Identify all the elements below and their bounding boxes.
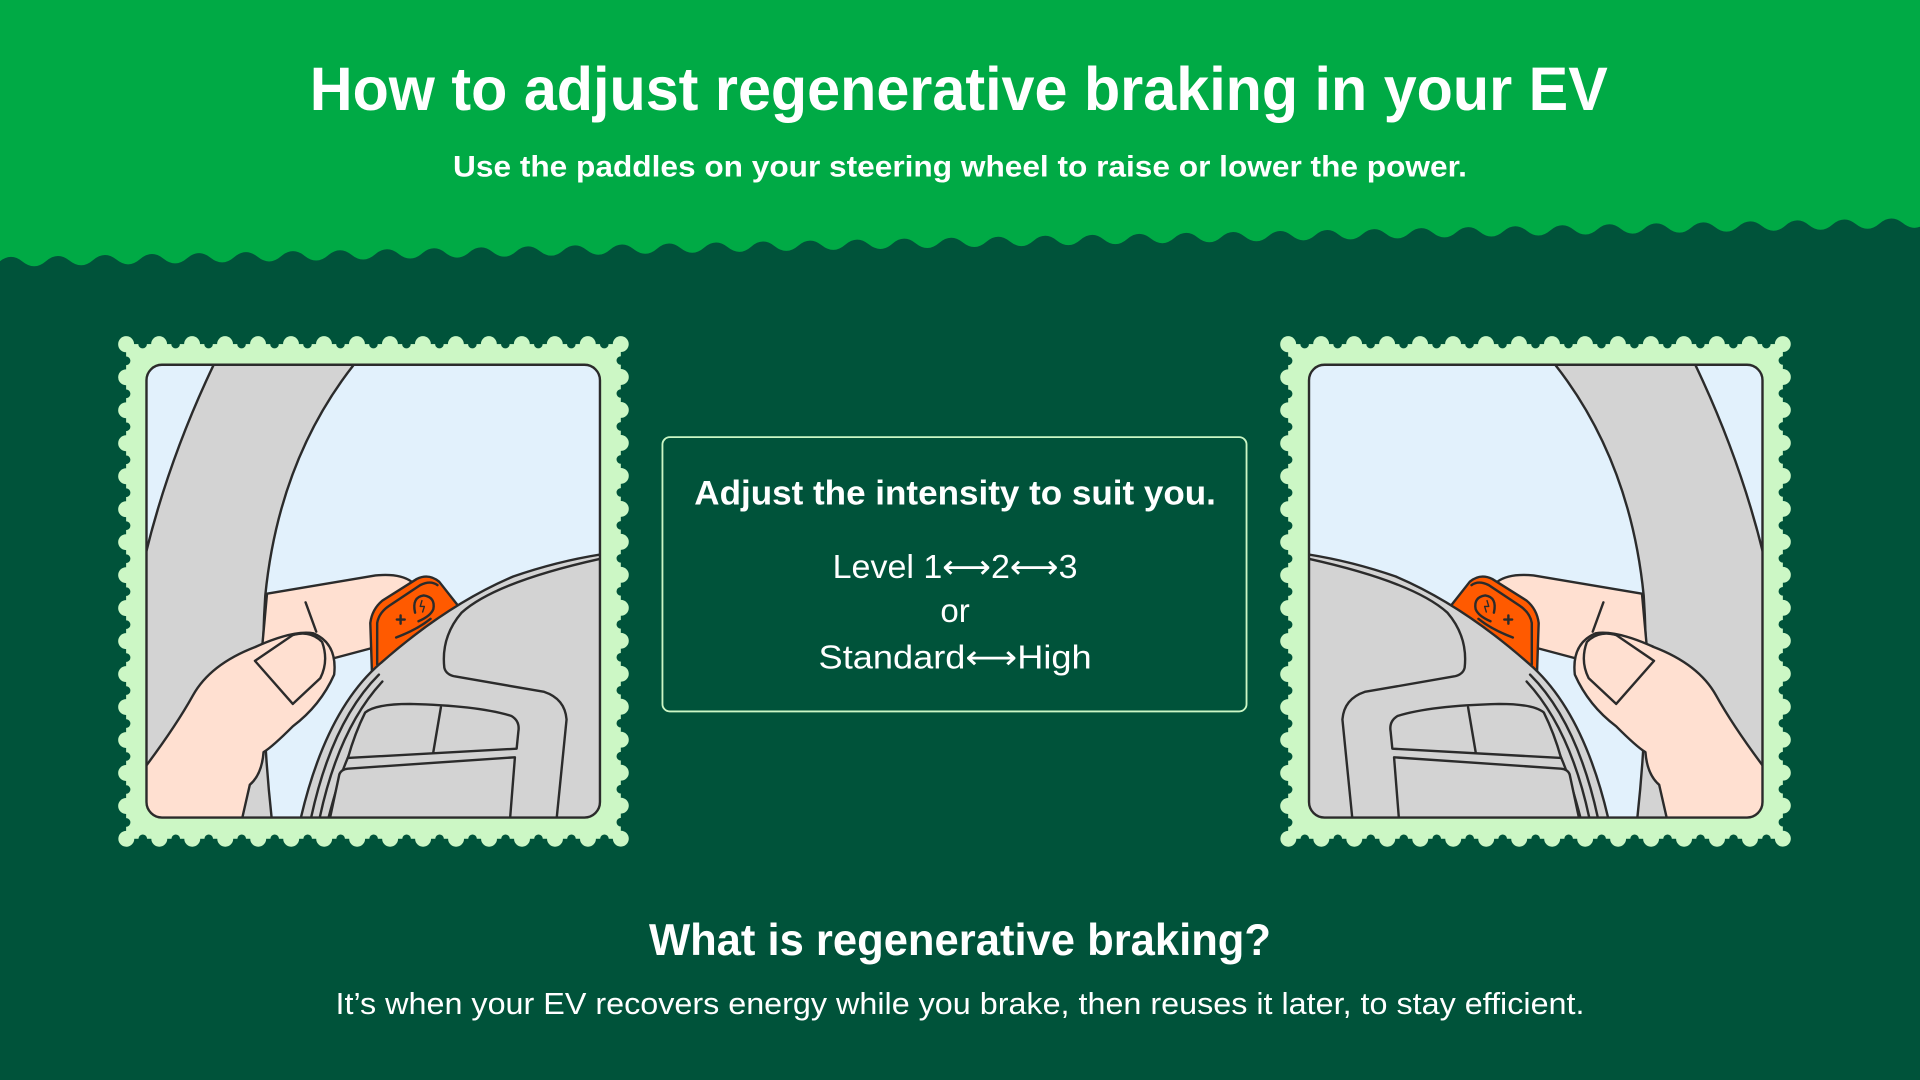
bottom body text: It’s when your EV recovers energy while you brake, then reuses it later, to stay efficient. <box>336 987 1584 1021</box>
header band <box>0 0 1920 267</box>
level text: Level 1⟷2⟷3 <box>833 549 1078 586</box>
bottom heading: What is regenerative braking? <box>649 916 1271 965</box>
subtitle: Use the paddles on your steering wheel to raise or lower the power. <box>453 150 1467 183</box>
stamp: right illustration <box>1288 344 1783 839</box>
title: How to adjust regenerative braking in your EV <box>310 55 1608 123</box>
panel: intensity levels <box>662 437 1247 711</box>
panel heading: Adjust the intensity to suit you. <box>694 474 1216 512</box>
standard high text: Standard⟷High <box>819 640 1092 677</box>
stamp: left illustration <box>126 344 621 839</box>
or text: or <box>940 593 970 630</box>
